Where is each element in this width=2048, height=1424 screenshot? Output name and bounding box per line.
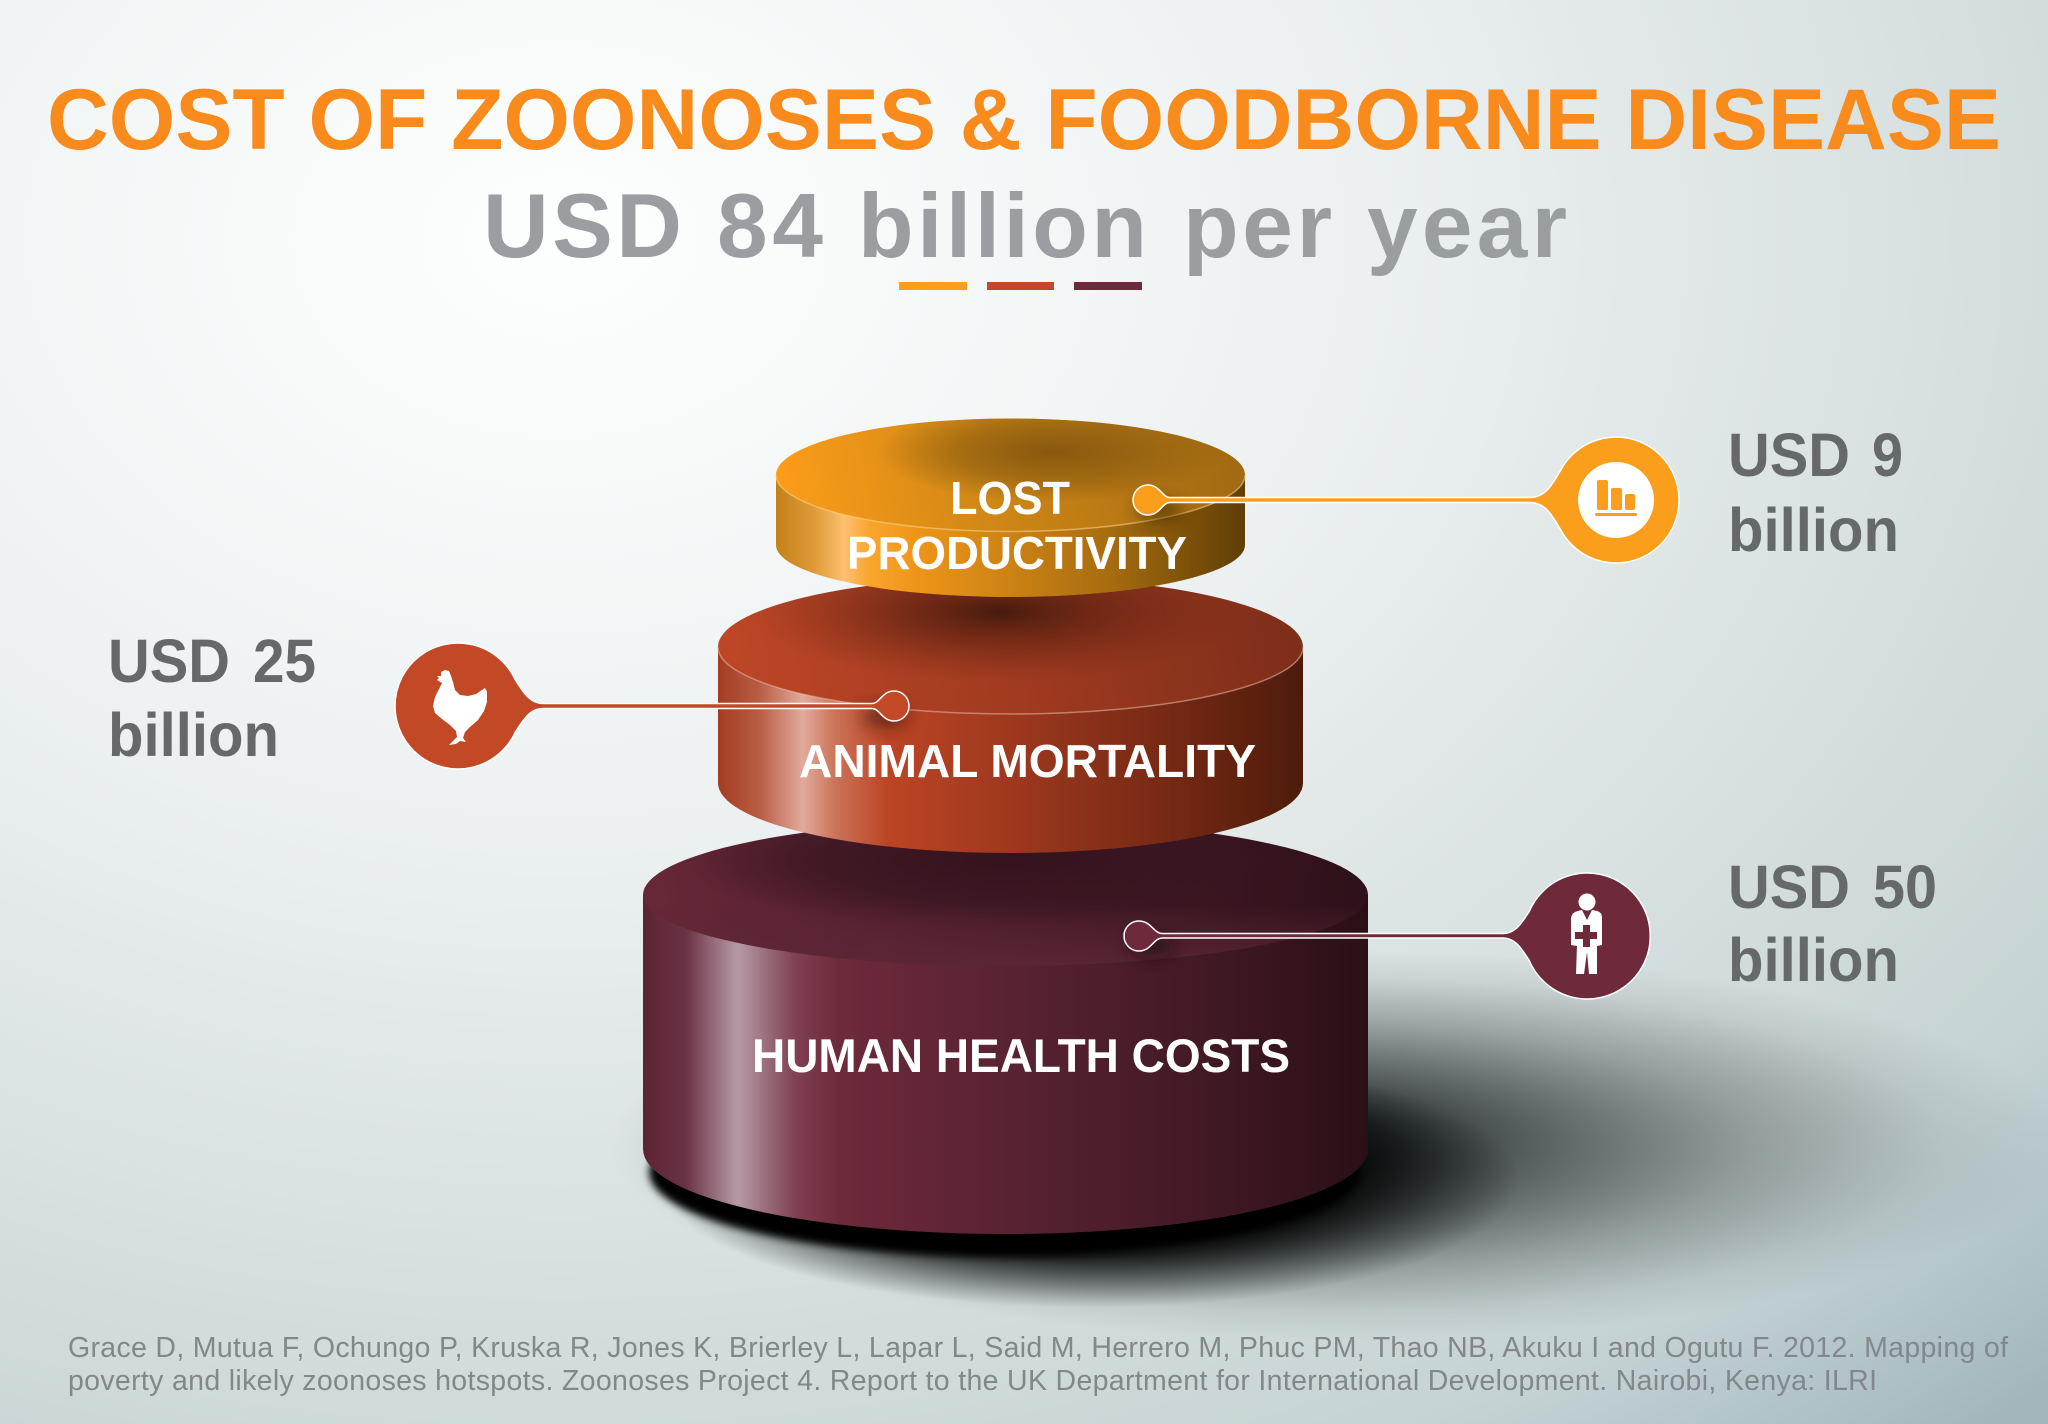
amount: USD 50 billion: billion	[1728, 926, 1899, 994]
amount: USD 9 billion: billion	[1728, 496, 1899, 564]
tier: lost productivity	[776, 418, 1245, 597]
amount: USD 9 billion: USD	[1728, 421, 1850, 489]
connector and dot	[1124, 873, 1650, 999]
tier: human health costs	[643, 820, 1368, 1234]
cylinder side	[776, 475, 1245, 597]
callout: human health costs	[1124, 873, 1650, 999]
icon: health worker	[1571, 894, 1602, 974]
pin dot shadow	[1128, 936, 1176, 958]
amount: USD 25 billion: USD	[108, 627, 230, 695]
callout: animal mortality	[395, 643, 909, 769]
ground shadow	[600, 940, 2048, 1350]
amount: USD 25 billion: billion	[108, 701, 279, 769]
connector and dot	[1133, 437, 1679, 563]
subtitle: billion	[858, 176, 1147, 277]
cylinder side	[718, 647, 1303, 853]
cylinder top	[776, 418, 1245, 532]
amount: USD 25 billion: 25	[253, 627, 316, 695]
amount: USD 9 billion: 9	[1872, 421, 1903, 489]
pin dot shadow	[1136, 499, 1184, 521]
source citation: poverty and likely zoonoses hotspots. Zoonoses Project 4. Report to the UK Department for International Development. Nairobi, Kenya: ILRI	[68, 1365, 1877, 1397]
cylinder side	[643, 895, 1368, 1234]
cylinder top	[643, 820, 1368, 966]
callout: lost productivity	[1133, 437, 1679, 563]
subtitle: year	[1367, 176, 1567, 277]
cylinder top	[718, 577, 1303, 714]
icon: chicken	[433, 670, 487, 745]
title accent bars	[899, 282, 1142, 290]
amount: USD 50 billion: 50	[1873, 853, 1937, 921]
subtitle: per	[1183, 176, 1332, 277]
tier label: PRODUCTIVITY	[847, 527, 1187, 579]
tier label: HUMAN HEALTH COSTS	[752, 1029, 1290, 1082]
pin dot shadow	[861, 706, 909, 728]
connector and dot	[395, 643, 909, 769]
tier label: LOST	[950, 472, 1070, 524]
icon: bar chart	[1578, 462, 1654, 538]
tier: animal mortality	[718, 577, 1303, 853]
amount: USD 50 billion: USD	[1728, 853, 1850, 921]
subtitle: 84	[717, 176, 823, 277]
tier label: ANIMAL MORTALITY	[799, 735, 1256, 787]
title: COST OF ZOONOSES & FOODBORNE DISEASE	[47, 72, 2001, 168]
subtitle: USD	[483, 176, 682, 277]
source citation: Grace D, Mutua F, Ochungo P, Kruska R, Jones K, Brierley L, Lapar L, Said M, Herrero M, Phuc PM, Thao NB, Akuku I and Ogutu F. 2012. Mapping of	[68, 1332, 2008, 1364]
